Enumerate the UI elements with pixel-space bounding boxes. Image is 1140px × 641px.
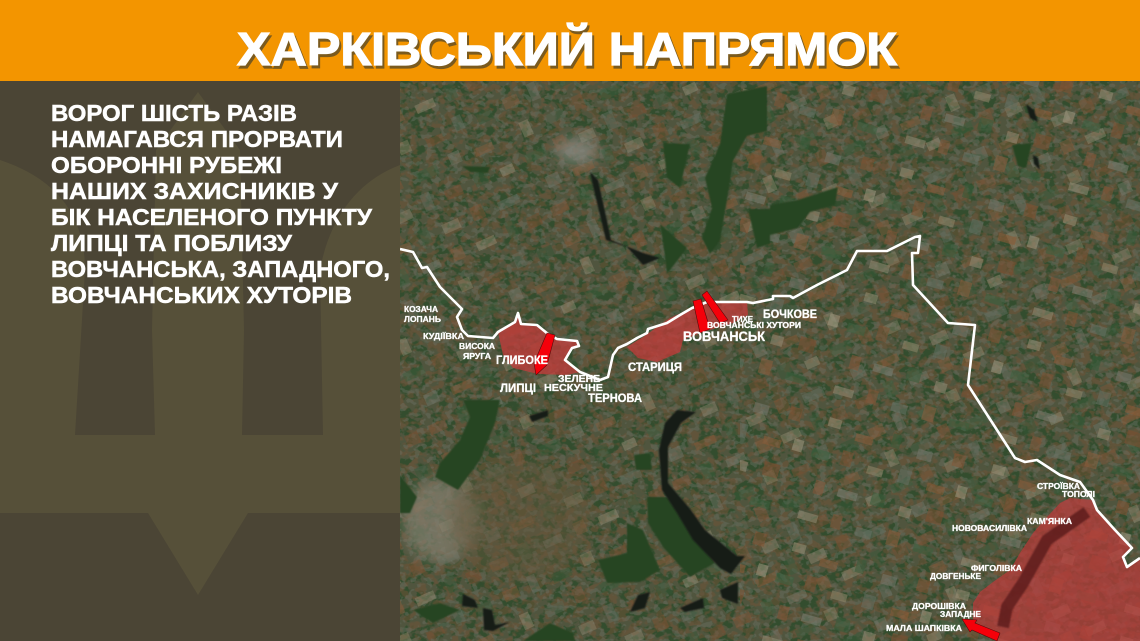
place labels: ТИХЕ xyxy=(732,315,754,324)
place labels: ДОВГЕНЬКЕ xyxy=(930,571,981,581)
icon: trident watermark xyxy=(0,92,400,595)
place labels: КАМ'ЯНКА xyxy=(1027,516,1072,526)
front line xyxy=(400,236,1140,567)
place labels: ГЛИБОКЕ xyxy=(496,353,548,367)
place labels: КОЗАЧА xyxy=(404,304,438,314)
place labels: НЕСКУЧНЕ xyxy=(544,382,603,394)
body text: ВОВЧАНСЬКИХ ХУТОРІВ xyxy=(51,282,352,308)
place labels: ТОПОЛІ xyxy=(1062,489,1095,499)
place labels: ЗАПАДНЕ xyxy=(940,609,981,619)
arrow: Lyptsi direction xyxy=(534,333,555,375)
place labels: ЯРУГА xyxy=(463,351,491,361)
place labels: ЛОПАНЬ xyxy=(404,314,441,324)
body text: ЛИПЦІ ТА ПОБЛИЗУ xyxy=(51,230,293,256)
arrow: Vovchansk west xyxy=(693,299,710,333)
body text: ОБОРОННІ РУБЕЖІ xyxy=(51,152,282,178)
body text: ВОВЧАНСЬКА, ЗАПАДНОГО, xyxy=(51,256,390,282)
title shadow: ХАРКІВСЬКИЙ НАПРЯМОК xyxy=(239,26,900,78)
occupied area: Hlyboke xyxy=(498,313,580,375)
title: ХАРКІВСЬКИЙ НАПРЯМОК xyxy=(237,23,898,75)
river and reservoirs xyxy=(462,104,1040,631)
place labels: НОВОВАСИЛІВКА xyxy=(952,523,1027,533)
place labels: КУДІЇВКА xyxy=(423,331,464,341)
place labels: ВИСОКА xyxy=(459,341,495,351)
panel: satellite map xyxy=(400,81,1140,641)
place labels: ФИГОЛІВКА xyxy=(971,563,1022,573)
body text: НАШИХ ЗАХИСНИКІВ У xyxy=(51,178,339,204)
place labels: ДОРОШІВКА xyxy=(912,601,966,611)
place labels xyxy=(404,304,1095,633)
place labels: СТРОЇВКА xyxy=(1037,481,1080,491)
place labels: МАЛА ШАПКІВКА xyxy=(886,623,962,633)
occupied area: southeast xyxy=(973,498,1140,641)
arrow: Zapadne xyxy=(962,619,1000,641)
body text xyxy=(51,100,390,308)
panel: text sidebar xyxy=(0,81,400,641)
header bar xyxy=(0,0,1140,81)
place labels: ВОВЧАНСЬКІ ХУТОРИ xyxy=(707,320,801,330)
body text: НАМАГАВСЯ ПРОРВАТИ xyxy=(51,126,343,152)
place labels: ВОВЧАНСЬК xyxy=(683,329,766,344)
arrow: Vovchansk east xyxy=(702,291,728,323)
place labels: БОЧКОВЕ xyxy=(763,309,817,321)
place labels: ТЕРНОВА xyxy=(588,393,642,405)
place labels: ЛИПЦІ xyxy=(500,383,536,395)
body text: БІК НАСЕЛЕНОГО ПУНКТУ xyxy=(51,204,373,230)
body text: ВОРОГ ШІСТЬ РАЗІВ xyxy=(51,100,297,126)
place labels: ЗЕЛЕНЕ xyxy=(558,373,600,385)
place labels: СТАРИЦЯ xyxy=(628,362,682,374)
occupied area: Vovchansk xyxy=(627,302,748,362)
